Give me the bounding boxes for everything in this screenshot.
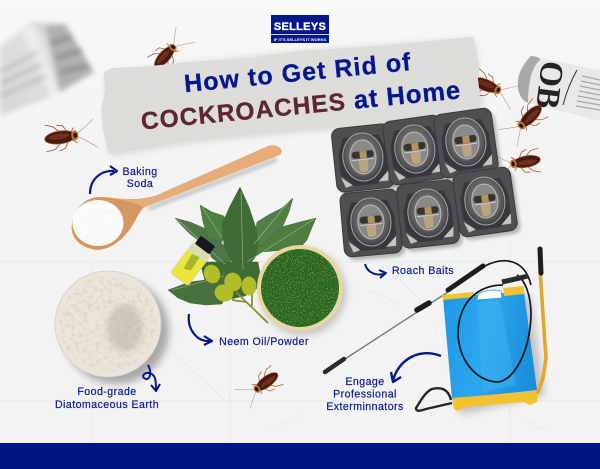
label: neem oil: Neem Oil/Powder	[219, 336, 309, 348]
cockroach middle right	[498, 97, 550, 148]
label: roach baits	[365, 264, 454, 278]
lever	[538, 268, 546, 392]
strap	[416, 388, 452, 411]
cockroach bottom	[235, 363, 285, 409]
label: diatomaceous earth: Food-grade	[77, 386, 137, 398]
label: diatomaceous earth: Diatomaceous Earth	[55, 399, 159, 411]
Selleys logo	[271, 15, 329, 43]
footer bar	[0, 443, 600, 469]
label: roach baits: Roach Baits	[392, 265, 454, 277]
cockroach lower right	[492, 146, 543, 180]
neem fruits	[201, 262, 256, 304]
arrow: baking soda	[90, 166, 117, 194]
cockroaches	[43, 25, 550, 409]
Selleys logo: IF IT'S SELLEYS IT WORKS	[274, 37, 326, 42]
label: exterminators: Professional	[333, 388, 397, 400]
label: baking soda: Baking	[122, 166, 158, 178]
wooden spoon with baking soda	[72, 145, 282, 250]
torn paper banner	[101, 37, 482, 155]
neem leaves, oil and powder	[168, 187, 346, 335]
label: diatomaceous earth	[55, 365, 160, 411]
spray wand	[325, 292, 448, 372]
backpack sprayer	[325, 249, 546, 415]
arrow: neem	[189, 314, 212, 345]
tank base	[452, 391, 538, 411]
label: baking soda: Soda	[127, 178, 153, 190]
hose loop	[458, 261, 531, 382]
baking soda powder	[72, 200, 124, 246]
blurred newspaper, left	[0, 22, 94, 116]
cockroach left	[43, 118, 98, 155]
cockroach top centre	[146, 25, 195, 76]
diatomaceous earth bowl	[55, 271, 169, 384]
neem leaves	[168, 187, 316, 305]
tank top	[442, 286, 524, 300]
title	[137, 43, 462, 136]
neem powder bowl	[260, 249, 346, 335]
cockroach by title right	[468, 68, 520, 110]
fruit stem	[232, 292, 268, 323]
label: neem oil	[189, 314, 309, 348]
headline letters on roll: OB	[528, 59, 570, 111]
arrow: exterminators	[391, 353, 441, 382]
title: How to Get Rid of	[183, 48, 413, 98]
label: baking soda	[90, 166, 158, 194]
label: exterminators	[326, 353, 441, 413]
roach bait trays	[331, 107, 522, 261]
arrow: roach baits	[365, 264, 386, 278]
sprayer shadow	[448, 295, 545, 415]
tank body	[443, 292, 537, 399]
newspaper roll, right	[518, 56, 600, 121]
oil bottle	[170, 234, 217, 286]
label: exterminators: Exterminnators	[326, 401, 404, 413]
title: COCKROACHES at Home	[140, 76, 462, 136]
Selleys logo: SELLEYS	[274, 21, 326, 33]
label: exterminators: Engage	[345, 376, 385, 388]
arrow: curly	[143, 365, 160, 391]
